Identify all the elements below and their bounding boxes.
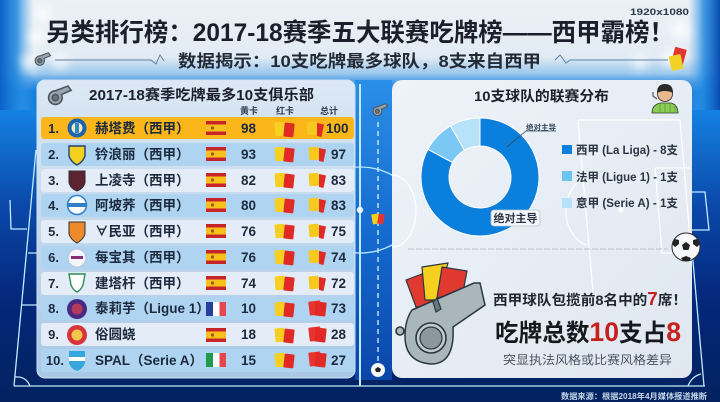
row 1 [41, 117, 354, 139]
legend: 法甲 (Ligue 1) - 1支 [576, 170, 678, 184]
row 6: 76 [241, 250, 257, 265]
column headers: 红卡 [276, 105, 294, 116]
panel heading: 2017-18赛季吃牌最多10支俱乐部 [89, 86, 315, 104]
icon: whistle [49, 86, 71, 104]
subtitle: 数据揭示：10支吃牌最多球队，8支来自西甲 [178, 51, 541, 71]
row 5: ∀民亚（西甲） [95, 224, 190, 239]
row 3: 3. [48, 173, 59, 188]
row 3: 上凌寺（西甲） [95, 172, 190, 188]
row 4: 80 [241, 198, 256, 213]
row 1: 100 [326, 121, 349, 136]
row 7: 72 [331, 276, 346, 291]
row 4: 83 [331, 198, 347, 213]
row 9 [41, 323, 354, 346]
legend [562, 143, 678, 210]
icon: whistle and cards [396, 263, 485, 364]
row 7: 74 [241, 276, 257, 291]
subtitle right ornament: cards and line [555, 47, 687, 71]
panel heading: 10支球队的联赛分布 [474, 88, 609, 104]
row 1: 98 [241, 121, 257, 136]
divider [408, 248, 668, 250]
icon: small whistle on line [373, 104, 388, 116]
row 5: 75 [331, 224, 347, 239]
row 6: 每宝其（西甲） [95, 249, 190, 265]
center spot [357, 207, 363, 213]
row 9: 9. [48, 327, 59, 342]
panel: ranking table [37, 80, 355, 378]
row 2: 97 [331, 147, 346, 162]
column headers: 黄卡 [240, 105, 258, 116]
donut chart [421, 118, 556, 236]
row 5 [41, 220, 354, 243]
row 10 [41, 349, 354, 372]
pitch lines [10, 84, 709, 386]
row 3: 83 [331, 173, 347, 188]
note: 突显执法风格或比赛风格差异 [503, 352, 672, 367]
row 2: 2. [48, 147, 59, 162]
row 4: 4. [48, 198, 59, 213]
row 5: 76 [241, 224, 257, 239]
source note: 数据来源：根据2018年4月媒体报道推断 [561, 391, 707, 401]
row 2: 93 [241, 147, 257, 162]
row 8 [41, 297, 354, 320]
icon: referee [652, 84, 678, 113]
row 3: 82 [241, 173, 256, 188]
subtitle left ornament: whistle and line [35, 53, 164, 65]
row 7: 7. [48, 276, 59, 291]
panel: league distribution [392, 80, 692, 378]
row 6: 74 [331, 250, 347, 265]
row 10: 27 [331, 353, 346, 368]
row 2 [41, 143, 354, 166]
callout: top: 绝对主导 [526, 122, 556, 132]
row 9: 18 [241, 327, 257, 342]
dimensions note: 1920x1080 [630, 7, 689, 17]
pitch lines over panel [392, 120, 691, 292]
row 10: 15 [241, 353, 257, 368]
row 3 [41, 169, 354, 192]
row 1: 赫塔费（西甲） [95, 120, 190, 136]
icon: small soccer ball [371, 363, 385, 377]
title: 另类排行榜：2017-18赛季五大联赛吃牌榜——西甲霸榜！ [46, 18, 674, 47]
key statement: 吃牌总数10支占8 [495, 317, 681, 347]
penalty spot [618, 208, 624, 212]
row 9: 28 [331, 327, 347, 342]
legend: 西甲 (La Liga) - 8支 [576, 143, 678, 157]
row 8: 泰莉芋（Ligue 1） [95, 300, 210, 316]
row 2: 钤浪丽（西甲） [95, 146, 190, 162]
row 8: 10 [241, 301, 256, 316]
icon: yellow and red cards [371, 213, 385, 224]
row 5: 5. [48, 224, 59, 239]
row 8: 73 [331, 301, 347, 316]
row 9: 俗圆蛲 [95, 327, 136, 342]
icon: soccer ball top right [672, 233, 700, 261]
row 7: 建塔杆（西甲） [95, 275, 190, 291]
row 4: 阿坡荞（西甲） [95, 197, 190, 213]
row 10: SPAL（Serie A） [95, 353, 203, 368]
row 6 [41, 246, 354, 269]
row 7 [41, 272, 354, 295]
column headers: 总计 [320, 105, 338, 116]
callout: donut label: 绝对主导 [494, 211, 538, 225]
legend: 意甲 (Serie A) - 1支 [576, 196, 678, 210]
callout: seven of top eight: 西甲球队包揽前8名中的 7席！ [493, 289, 687, 309]
row 1: 1. [48, 121, 59, 136]
row 10: 10. [46, 353, 64, 368]
row 8: 8. [48, 301, 59, 316]
row 6: 6. [48, 250, 59, 265]
row 4 [41, 194, 354, 217]
column headers [240, 105, 338, 116]
